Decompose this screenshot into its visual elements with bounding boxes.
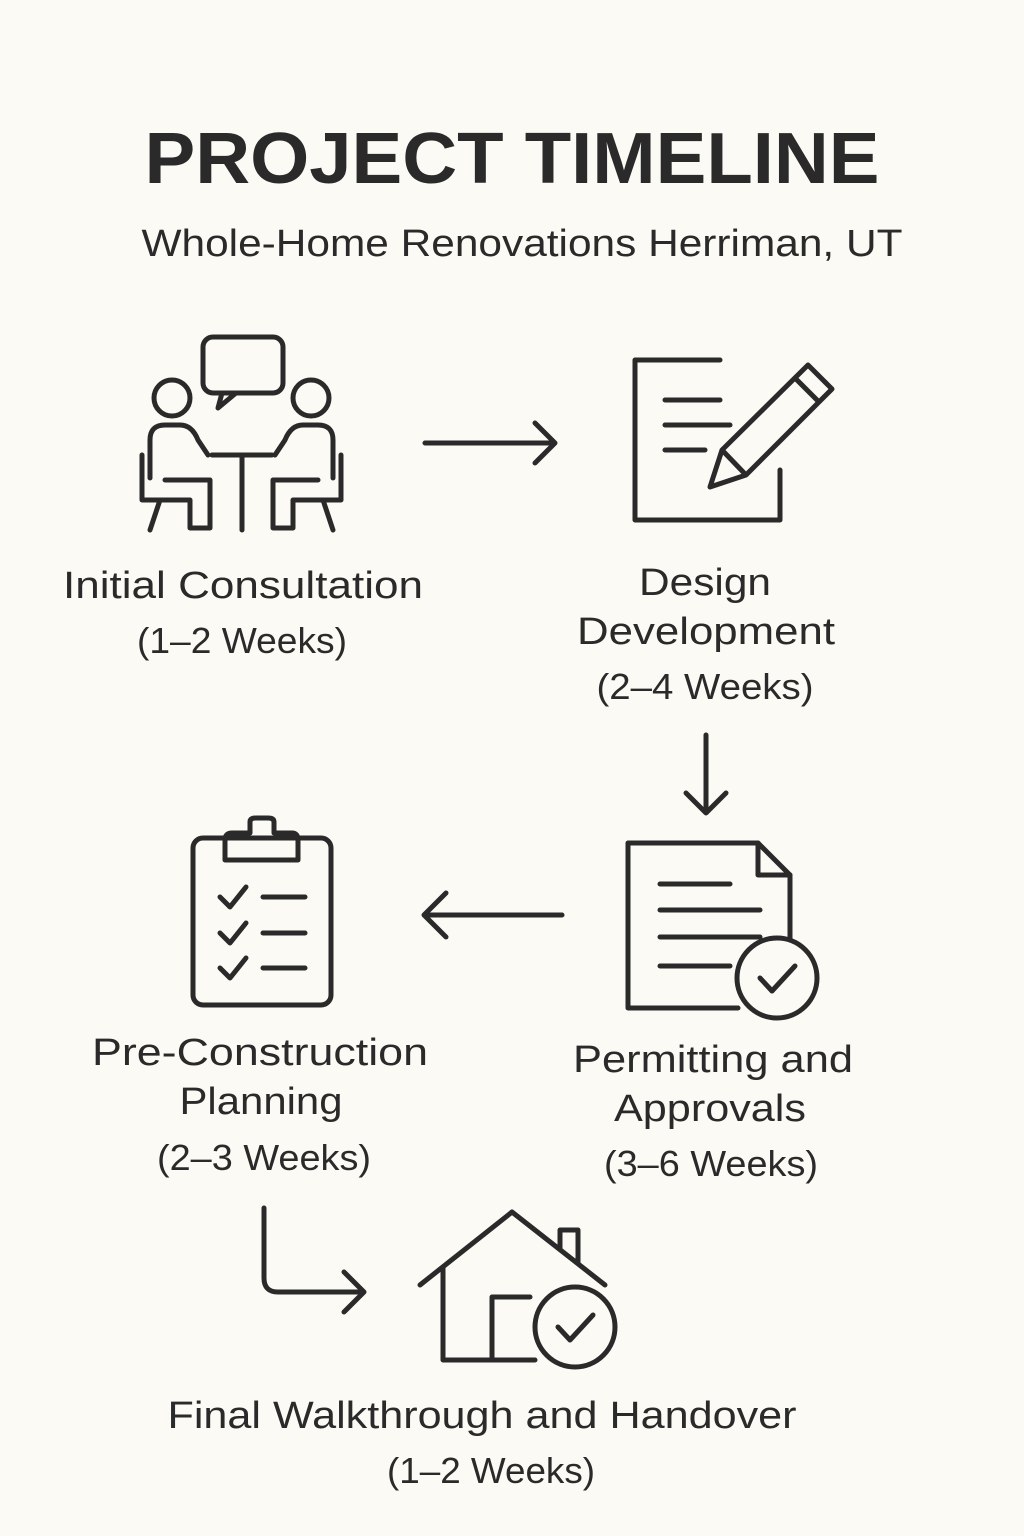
- label: pre-construction planning: [92, 1032, 428, 1178]
- label: final walkthrough: [168, 1395, 797, 1491]
- label: final walkthrough: Final Walkthrough and Handover: [168, 1395, 797, 1437]
- label: pre-construction planning: Pre-Construction: [92, 1032, 428, 1074]
- icon: clipboard checklist: [193, 818, 331, 1005]
- arrow: planning to handover: [264, 1208, 364, 1312]
- label: final walkthrough: (1–2 Weeks): [387, 1450, 595, 1491]
- label: initial consultation: [63, 565, 423, 661]
- icon: design document with pencil: [635, 360, 832, 520]
- subtitle: Whole-Home Renovations Herriman, UT: [142, 223, 902, 265]
- label: design development: (2–4 Weeks): [596, 666, 814, 707]
- icon: permit document with check: [628, 843, 817, 1018]
- label: design development: Development: [577, 611, 836, 653]
- title: PROJECT TIMELINE: [144, 119, 880, 199]
- icon: consultation: [142, 337, 341, 530]
- label: initial consultation: Initial Consultation: [63, 565, 423, 607]
- label: design development: Design: [639, 562, 771, 604]
- label: permitting and approvals: [573, 1039, 853, 1184]
- label: initial consultation: (1–2 Weeks): [137, 620, 347, 661]
- icon: house with check: [420, 1212, 615, 1367]
- label: pre-construction planning: Planning: [180, 1081, 342, 1123]
- label: permitting and approvals: (3–6 Weeks): [604, 1143, 818, 1184]
- arrow: permitting to planning: [424, 893, 562, 937]
- label: design development: [577, 562, 836, 707]
- arrow: consultation to design: [425, 423, 555, 463]
- arrow: design to permitting: [686, 735, 726, 813]
- label: permitting and approvals: Permitting and: [573, 1039, 853, 1081]
- label: permitting and approvals: Approvals: [614, 1088, 806, 1130]
- label: pre-construction planning: (2–3 Weeks): [157, 1137, 371, 1178]
